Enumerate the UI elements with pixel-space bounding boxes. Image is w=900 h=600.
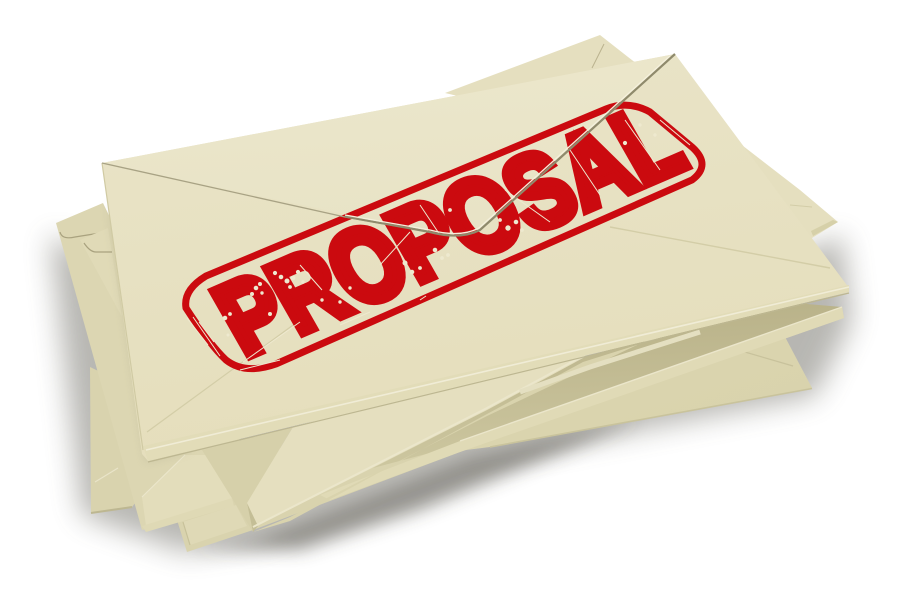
envelope: far left lower [90,367,200,513]
envelope: centre front [202,320,700,532]
stamp: PROPOSAL [186,81,702,378]
stamp border [186,105,702,369]
shadow under top envelope on left [108,200,190,462]
inner shaded gap [373,300,842,468]
envelope front edge [143,285,849,461]
ground shadow [50,235,852,552]
envelope: bottom centre [177,300,844,552]
envelope: left upper [80,228,122,317]
envelope flap [102,54,675,236]
envelope: back top [445,35,838,238]
band edge [320,307,844,500]
envelope: top front [102,54,849,462]
stamp text: PROPOSAL [196,81,701,378]
fold lines [147,320,300,432]
envelope: bottom right [450,333,812,452]
stamp wear marks [187,120,690,370]
flap edge over stamp [102,54,675,236]
envelope: left middle [56,203,240,532]
